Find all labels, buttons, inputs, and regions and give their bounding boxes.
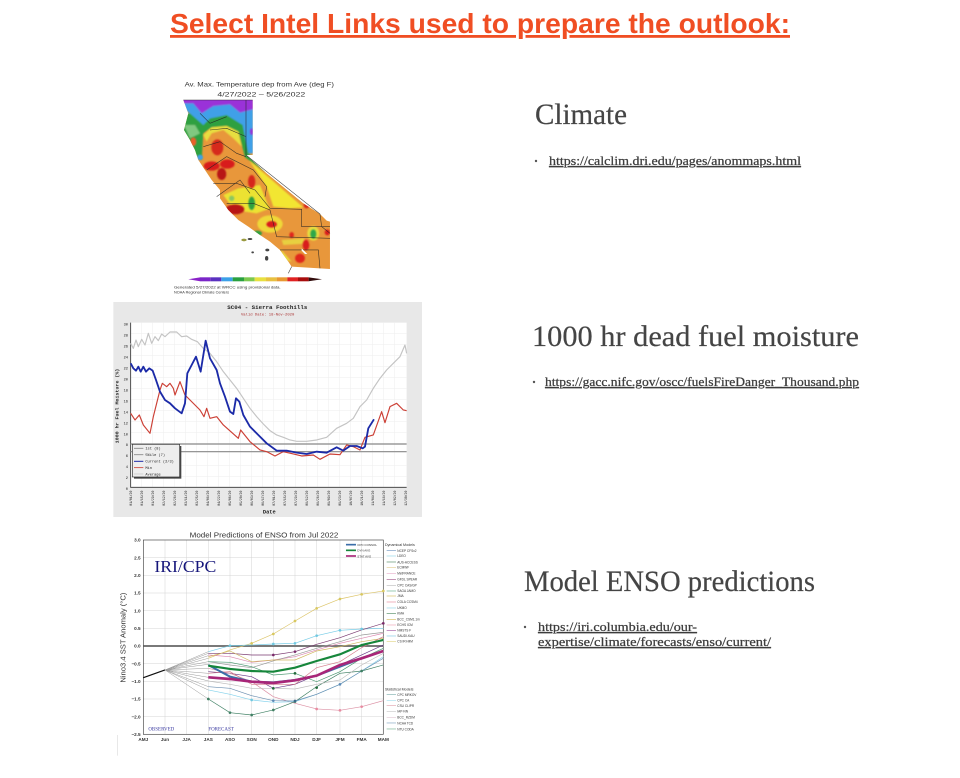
dynamical models legend: ECMWF: [397, 566, 409, 570]
statistical models legend: CPC CA: [397, 699, 410, 703]
dynamical models legend: COLA CCSM4: [397, 600, 418, 604]
observed and fan lines: [143, 670, 165, 678]
chart: 1000 hr dead fuel moisture: Date: [263, 509, 276, 515]
map shape: [180, 97, 333, 272]
dynamical models legend: [385, 543, 420, 644]
chart: 1000 hr dead fuel moisture: 12/02/20: [393, 491, 397, 506]
map title: [185, 81, 334, 98]
chart title: SC04 - Sierra Foothills: [227, 304, 308, 311]
chart: 1000 hr dead fuel moisture: 07/29/20: [294, 491, 298, 506]
county and state borders: [183, 100, 330, 273]
statistical models legend: CSU CLIPR: [397, 704, 415, 708]
chart: 1000 hr dead fuel moisture: 05/20/20: [239, 491, 243, 506]
dynamical models legend: SAUDI-KAU: [397, 634, 415, 638]
ensemble legend: [346, 543, 377, 558]
chart legend: 1st (8): [145, 447, 161, 452]
axis labels: 30: [124, 323, 128, 327]
chart: 1000 hr dead fuel moisture: 02/26/20: [173, 491, 177, 506]
ensemble averages: [208, 640, 383, 683]
chart: 1000 hr dead fuel moisture: 01/15/20: [140, 491, 144, 506]
axis labels: 14: [124, 411, 129, 415]
chart legend: [132, 444, 181, 479]
IRI/CPC label: IRI/CPC: [154, 557, 216, 576]
dynamical models legend: MetFRANCE: [397, 572, 416, 576]
chart: 1000 hr dead fuel moisture: 07/01/20: [272, 491, 276, 506]
chart: 1000 hr dead fuel moisture: 08/12/20: [305, 491, 309, 506]
dynamical models legend: Dynamical Models: [385, 543, 415, 547]
chart: 1000 hr dead fuel moisture: [113, 302, 422, 517]
section: ENSO: [524, 565, 815, 649]
y axis labels: −1.5: [131, 697, 141, 702]
dynamical models legend: BCC_CSM1.1m: [397, 617, 420, 621]
dynamical models legend: SAGA JAMO: [397, 589, 416, 593]
chart: 1000 hr dead fuel moisture: 05/06/20: [228, 491, 232, 506]
y axis labels: −2.0: [131, 714, 141, 719]
chart: 1000 hr dead fuel moisture: 01/29/20: [151, 491, 155, 506]
statistical models legend: Statistical Models: [385, 687, 414, 691]
zero line: [143, 643, 383, 648]
map footnote: [174, 286, 281, 294]
x axis labels: NDJ: [290, 737, 300, 742]
section: fuel moisture: [532, 320, 859, 389]
dynamical models legend: KMA: [397, 611, 405, 615]
chart: 1000 hr dead fuel moisture: 10/07/20: [349, 491, 353, 506]
dynamical models legend: CS IRI-MM: [397, 640, 413, 644]
dynamical models legend: UKMO: [397, 606, 407, 610]
bullet link: climate: https://calclim.dri.edu/pages/anommaps.html: [549, 154, 802, 168]
chart legend: 5%ile (7): [145, 453, 165, 458]
dynamical models legend: LDEO: [397, 554, 406, 558]
chart: 1000 hr dead fuel moisture: 11/18/20: [382, 491, 386, 506]
statistical models legend: IAP-NN: [397, 710, 409, 714]
chart: 1000 hr dead fuel moisture: 08/26/20: [316, 491, 320, 506]
y axis labels: 1.0: [134, 608, 141, 613]
chart: 1000 hr dead fuel moisture: 03/25/20: [195, 491, 199, 506]
ensemble legend: STAT AVG: [357, 554, 372, 558]
axis labels: 10: [124, 433, 128, 437]
y axis labels: 1.5: [134, 591, 141, 596]
x axis labels: JFM: [335, 737, 345, 742]
chart: 1000 hr dead fuel moisture: 06/17/20: [261, 491, 265, 506]
chart: 1000 hr dead fuel moisture: 12/30/20: [404, 491, 408, 506]
x axis labels: JJA: [182, 737, 192, 742]
y axis labels: −0.5: [131, 661, 141, 666]
chart title: Model Predictions of ENSO from Jul 2022: [190, 533, 338, 540]
model markers: [207, 590, 385, 716]
y axis labels: −2.5: [131, 732, 141, 737]
title: Select Intel Links used to prepare the outlook:: [170, 8, 790, 39]
x axis labels: SON: [247, 737, 257, 742]
map footnote: Generated 5/27/2022 at WRCC using provisional data.: [174, 286, 281, 290]
axis labels: [124, 323, 129, 492]
map title: 4/27/2022 – 5/26/2022: [217, 91, 306, 98]
x axis labels: OND: [268, 737, 279, 742]
y axis labels: [131, 538, 141, 737]
dynamical models legend: ECHS ICM: [397, 623, 413, 627]
chart: 1000 hr dead fuel moisture: 03/11/20: [184, 491, 188, 506]
chart: 1000 hr dead fuel moisture: Valid Date: 18-Nov-2020: [241, 312, 294, 316]
x axis labels: Jun: [161, 737, 169, 742]
axis labels: 28: [124, 334, 128, 338]
chart legend: Min: [145, 466, 152, 471]
chart: 1000 hr dead fuel moisture: 02/12/20: [162, 491, 166, 506]
statistical models legend: BCC_RZDM: [397, 716, 415, 720]
dynamical models legend: AUS-ACCESS: [397, 560, 418, 564]
axis labels: 20: [124, 378, 128, 382]
axis labels: 18: [124, 389, 128, 393]
chart: 1000 hr dead fuel moisture: 09/23/20: [338, 491, 342, 506]
heading: climate: Climate: [535, 98, 627, 131]
axis labels: 2: [126, 477, 128, 481]
axis labels: 12: [124, 422, 128, 426]
x axis labels: FMA: [357, 737, 367, 742]
chart legend: Average: [145, 473, 161, 477]
chart: 1000 hr dead fuel moisture: 06/03/20: [250, 491, 254, 506]
map footnote: NOAA Regional Climate Centers: [174, 290, 229, 294]
threshold lines: [131, 444, 407, 452]
dynamical models legend: GFDL SPEAR: [397, 577, 418, 581]
y axis labels: 2.0: [134, 573, 141, 578]
data lines: [131, 332, 407, 459]
y axis labels: 3.0: [134, 538, 141, 543]
statistical models legend: NTU CODA: [397, 727, 415, 731]
bullet link: ENSO: https://iri.columbia.edu/our-: [538, 620, 697, 634]
axis labels: 4: [126, 466, 129, 470]
statistical models legend: [385, 687, 417, 731]
x axis labels: ASO: [225, 737, 235, 742]
axis labels: 8: [126, 444, 128, 448]
heading: ENSO: Model ENSO predictions: [524, 565, 815, 598]
x axis labels: JAS: [204, 737, 213, 742]
y axis labels: −1.0: [131, 679, 141, 684]
chart: 1000 hr dead fuel moisture: 09/09/20: [327, 491, 331, 506]
x axis labels: AMJ: [138, 737, 149, 742]
axis labels: 24: [124, 356, 129, 360]
chart: 1000 hr dead fuel moisture: 07/15/20: [283, 491, 287, 506]
islands: [241, 238, 269, 261]
axis labels: 6: [126, 455, 128, 459]
chart legend: Current (2/3): [145, 460, 174, 465]
map: California temperature departure: [174, 81, 334, 294]
dynamical models legend: CPC CAS/GP: [397, 583, 417, 587]
axis labels: 22: [124, 367, 128, 371]
bullet link: fuel moisture: https://gacc.nifc.gov/oscc/fuelsFireDanger_Thousand.php: [545, 375, 859, 389]
bullet link: ENSO: [524, 620, 772, 649]
y axis labels: 2.5: [134, 555, 141, 560]
x axis labels: DJF: [312, 737, 321, 742]
chart: 1000 hr dead fuel moisture: 1000 hr Fuel Moisture (%): [115, 369, 121, 443]
colour bar legend: [188, 277, 322, 281]
bullet link: ENSO: expertise/climate/forecasts/enso/current/: [538, 635, 772, 649]
chart: 1000 hr dead fuel moisture: 04/08/20: [206, 491, 210, 506]
axis labels: 0: [126, 488, 128, 492]
dynamical models legend: NMSTS F: [397, 629, 411, 633]
y axis labels: 0.5: [134, 626, 141, 631]
statistical models legend: NCAA TCD: [397, 721, 414, 725]
ensemble legend: DYN AVG: [357, 549, 371, 553]
chart: model ENSO predictions: OBSERVED: [148, 728, 175, 733]
chart: 1000 hr dead fuel moisture: 04/22/20: [217, 491, 221, 506]
chart: model ENSO predictions: Nino3.4 SST Anomaly (°C): [119, 593, 127, 683]
dynamical models legend: JMA: [397, 594, 405, 598]
heading: fuel moisture: 1000 hr dead fuel moisture: [532, 320, 859, 353]
statistical models legend: CPC MRKOV: [397, 693, 417, 697]
ensemble legend: CPC CONSOL: [357, 543, 377, 547]
section: climate: [535, 98, 802, 168]
axis labels: 16: [124, 400, 128, 404]
axis labels: 26: [124, 345, 128, 349]
chart: 1000 hr dead fuel moisture: 11/04/20: [371, 491, 375, 506]
chart: 1000 hr dead fuel moisture: 10/21/20: [360, 491, 364, 506]
chart: model ENSO predictions: [117, 528, 426, 756]
chart: model ENSO predictions: FORECAST: [208, 728, 234, 733]
dynamical models legend: NCEP CFSv2: [397, 549, 417, 553]
model lines: [208, 591, 383, 715]
y axis labels: 0.0: [134, 644, 141, 649]
chart: 1000 hr dead fuel moisture: 01/01/20: [129, 491, 133, 506]
x axis labels: [138, 737, 389, 742]
x axis labels: MAM: [378, 737, 389, 742]
map title: Av. Max. Temperature dep from Ave (deg F): [185, 81, 334, 88]
